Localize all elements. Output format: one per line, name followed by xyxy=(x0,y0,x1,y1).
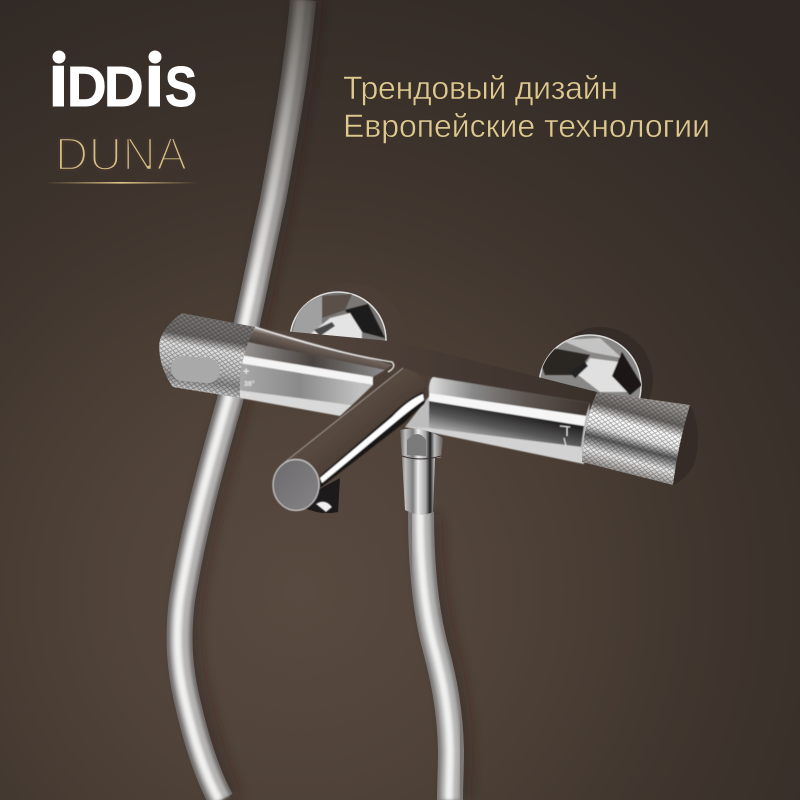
scale markings xyxy=(560,426,570,446)
right knurled handle xyxy=(582,392,698,485)
temperature markings: + xyxy=(243,366,249,378)
wall mount: right xyxy=(539,327,653,419)
hose holder xyxy=(400,429,443,515)
spout end disc xyxy=(273,460,319,510)
wall mount: left xyxy=(290,291,387,384)
logo: iDDiS: D xyxy=(104,54,144,118)
left thermostat barrel xyxy=(238,327,394,416)
handle end cap xyxy=(673,405,698,485)
headline text xyxy=(343,70,710,144)
handle button xyxy=(170,355,221,384)
spout outlet xyxy=(300,478,340,513)
logo: iDDiS: i xyxy=(48,38,69,122)
faucet body xyxy=(255,327,597,410)
hose shadows xyxy=(187,0,459,800)
temperature markings: 38° xyxy=(244,380,255,388)
logo: iDDiS xyxy=(52,50,196,107)
gold rule xyxy=(45,182,198,184)
hose: right xyxy=(420,512,451,800)
hose: left, running from top of page to the bottom xyxy=(178,0,303,800)
temperature markings xyxy=(243,366,255,399)
right thermostat barrel xyxy=(405,377,590,464)
headline text: Трендовый дизайн xyxy=(343,70,618,106)
spout xyxy=(273,368,426,512)
collection name: DUNA: DUNA xyxy=(55,128,187,180)
left knurled handle xyxy=(159,313,255,398)
spout highlight xyxy=(320,392,425,488)
logo: iDDiS: S xyxy=(165,55,197,119)
headline text: Европейские технологии xyxy=(343,108,710,144)
temperature markings: – xyxy=(245,390,250,399)
logo: iDDiS: D xyxy=(67,54,107,118)
logo: iDDiS: i xyxy=(144,38,165,122)
